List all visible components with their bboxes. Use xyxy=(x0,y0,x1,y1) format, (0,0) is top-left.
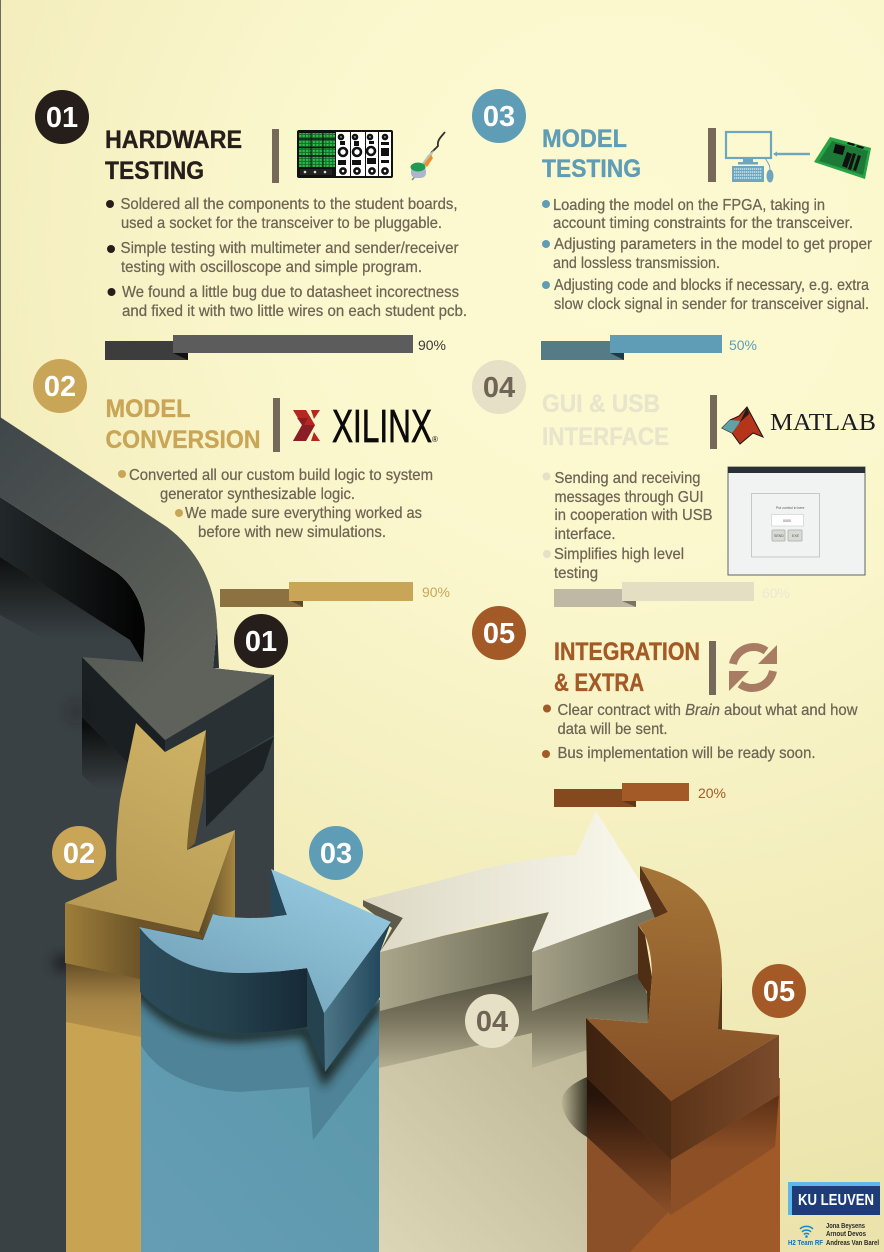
text: gui bullets: Sending and receiving xyxy=(554,470,700,487)
number 04: 04 xyxy=(483,372,515,404)
panel: integration and extra xyxy=(472,606,858,807)
badge 02 on arrow xyxy=(52,826,106,880)
heading: gui and usb interface: GUI & USB xyxy=(542,390,660,418)
panel: model conversion xyxy=(33,359,450,607)
screenshot: gui window: SEND xyxy=(774,534,784,538)
team credits: Jona Beysens xyxy=(826,1223,865,1230)
progress bar 60% xyxy=(554,582,790,607)
heading: hardware testing: HARDWARE xyxy=(105,126,242,154)
icon: wifi xyxy=(800,1226,813,1237)
badge 01 on arrow: 01 xyxy=(245,626,277,658)
number 03: 03 xyxy=(483,101,515,133)
heading: model testing: MODEL xyxy=(542,125,627,153)
icon: computer xyxy=(726,132,774,182)
text: model testing bullets xyxy=(542,197,873,313)
icon: breadboard xyxy=(297,130,393,178)
heading: gui and usb interface xyxy=(542,390,669,451)
team credits xyxy=(788,1223,879,1247)
icon: soldering iron and solder xyxy=(410,132,445,180)
logo: xilinx: XILINX xyxy=(332,400,432,452)
logo: xilinx xyxy=(293,400,438,452)
number 01: 01 xyxy=(46,102,78,134)
arrow 03: blue column and arrow xyxy=(135,869,391,1252)
text: hardware bullets: We found a little bug due to datasheet incorectness xyxy=(122,284,459,301)
text: conversion bullets: Converted all our custom build logic to system xyxy=(129,467,433,484)
heading: model conversion xyxy=(106,395,260,454)
progress bar 20%: 20% xyxy=(698,785,726,801)
text: integration bullets: data will be sent. xyxy=(558,721,668,738)
logo: ku leuven xyxy=(788,1182,880,1215)
icon: fpga board xyxy=(814,137,871,179)
panel: hardware testing xyxy=(35,90,467,360)
number 03 xyxy=(472,89,526,143)
heading: model testing: TESTING xyxy=(542,155,641,183)
heading: gui and usb interface: INTERFACE xyxy=(542,423,669,451)
number 04 xyxy=(472,360,526,414)
panel: model testing xyxy=(472,89,873,360)
icon: refresh arrows xyxy=(729,645,777,691)
text: hardware bullets: Simple testing with multimeter and sender/receiver xyxy=(120,240,459,257)
text: gui bullets: testing xyxy=(554,565,598,582)
heading: model conversion: MODEL xyxy=(106,395,190,423)
number 02 xyxy=(33,359,87,413)
text: hardware bullets: used a socket for the transceiver to be pluggable. xyxy=(121,215,442,232)
text: gui bullets: messages through GUI xyxy=(554,489,704,506)
text: conversion bullets xyxy=(118,467,433,541)
text: conversion bullets: We made sure everything worked as xyxy=(185,505,422,522)
screenshot: gui window xyxy=(728,467,865,575)
number 05 xyxy=(472,606,526,660)
heading: integration and extra xyxy=(554,638,700,697)
arrow 05: brown column and arrow xyxy=(562,866,780,1252)
screenshot: gui window: EXE xyxy=(792,534,800,538)
text: model testing bullets: account timing constraints for the transceiver. xyxy=(553,215,853,232)
badge 01 on arrow xyxy=(234,614,288,668)
progress bar 90% xyxy=(220,582,450,607)
text: conversion bullets: generator synthesizable logic. xyxy=(160,486,355,503)
heading: model testing xyxy=(542,125,641,183)
progress bar 90% xyxy=(105,335,446,360)
heading: integration and extra: INTEGRATION xyxy=(554,638,700,666)
logo: matlab xyxy=(722,407,876,444)
text: integration bullets: Clear contract with Brain about what and how xyxy=(558,702,858,719)
badge 02 on arrow: 02 xyxy=(63,838,95,870)
heading: hardware testing xyxy=(105,126,242,185)
progress bar 90%: 90% xyxy=(418,337,446,353)
screenshot: gui window: 0000 xyxy=(783,519,791,523)
team credits: Arnout Devos xyxy=(826,1231,866,1238)
progress bar 60%: 60% xyxy=(762,585,790,601)
text: hardware bullets: and fixed it with two little wires on each student pcb. xyxy=(122,303,467,320)
text: gui bullets: Simplifies high level xyxy=(554,546,684,563)
text: integration bullets: Bus implementation will be ready soon. xyxy=(558,745,816,762)
progress bar 90%: 90% xyxy=(422,584,450,600)
text: integration bullets xyxy=(542,702,858,762)
text: hardware bullets: Soldered all the components to the student boards, xyxy=(120,196,458,213)
progress bar 50%: 50% xyxy=(729,337,757,353)
logo: xilinx: ® xyxy=(432,435,438,444)
badge 03 on arrow xyxy=(309,826,363,880)
logo: matlab: MATLAB xyxy=(770,410,876,436)
text: gui bullets xyxy=(542,470,712,582)
arrow 02: gold column and arrow xyxy=(52,723,235,1252)
badge 04 on arrow xyxy=(465,994,519,1048)
team credits: H2 Team RF xyxy=(788,1238,823,1247)
panel: gui and usb interface xyxy=(472,360,876,607)
text: model testing bullets: Loading the model on the FPGA, taking in xyxy=(553,197,825,214)
text: model testing bullets: Adjusting parameters in the model to get proper xyxy=(554,236,873,253)
text: conversion bullets: before with new simulations. xyxy=(198,524,386,541)
text: hardware bullets: testing with oscilloscope and simple program. xyxy=(121,259,422,276)
progress bar 20% xyxy=(554,783,726,807)
arrow: board to computer xyxy=(773,152,810,156)
text: gui bullets: interface. xyxy=(554,526,616,543)
badge 03 on arrow: 03 xyxy=(320,838,352,870)
arrow 01: dark column and arrow xyxy=(0,417,274,1252)
number 02: 02 xyxy=(44,371,76,403)
badge 04 on arrow: 04 xyxy=(476,1006,508,1038)
number 01 xyxy=(35,90,89,144)
progress bar 50% xyxy=(541,335,757,360)
heading: hardware testing: TESTING xyxy=(105,157,204,185)
text: model testing bullets: and lossless transmission. xyxy=(553,255,720,272)
badge 05 on arrow: 05 xyxy=(763,976,795,1008)
heading: model conversion: CONVERSION xyxy=(106,426,260,454)
text: hardware bullets xyxy=(106,196,467,320)
heading: integration and extra: & EXTRA xyxy=(554,669,644,697)
text: gui bullets: in cooperation with USB xyxy=(554,507,712,524)
badge 05 on arrow xyxy=(752,964,806,1018)
number 05: 05 xyxy=(483,618,515,650)
screenshot: gui window: Put control in here xyxy=(776,506,804,510)
arrow 04: beige column and arrow xyxy=(363,811,668,1252)
